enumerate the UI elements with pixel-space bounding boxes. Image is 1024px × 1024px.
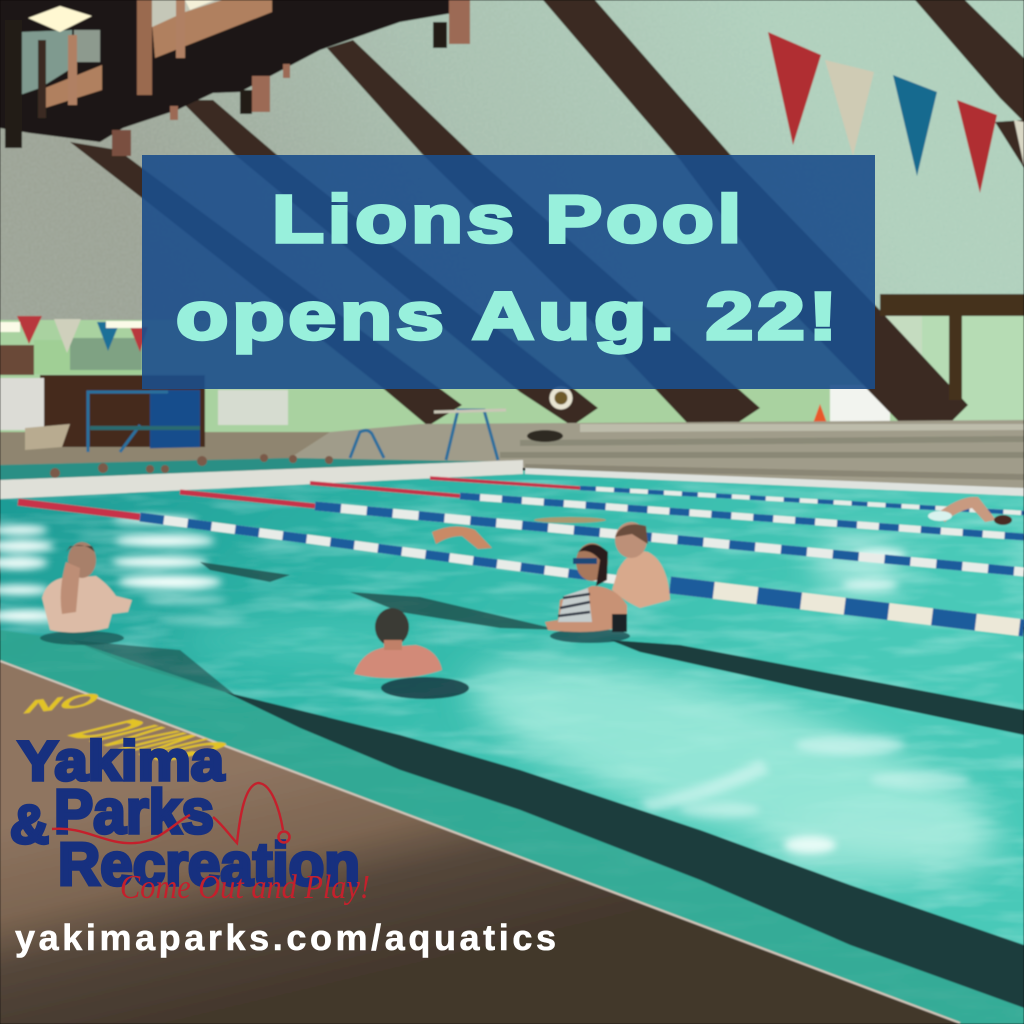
logo ampersand: & — [10, 795, 49, 855]
water glints — [0, 516, 1007, 897]
lifebuoy — [552, 389, 570, 407]
woman with goggles — [545, 543, 630, 643]
swimmer far right — [928, 497, 1012, 525]
lane rope 1 — [18, 502, 1024, 628]
gear on deck — [527, 430, 563, 442]
logo: Yakima Parks & Recreation — [10, 729, 370, 906]
headline line two: opens Aug. 22! — [176, 279, 841, 354]
headline line one: Lions Pool — [272, 182, 745, 257]
logo red swoosh — [52, 783, 290, 843]
logo word Parks: Parks — [54, 778, 214, 847]
painted no diving warning: DIVING — [44, 713, 255, 768]
man in centre — [354, 608, 469, 699]
swimmer middle — [432, 526, 492, 549]
white bulkhead — [0, 460, 523, 499]
water — [0, 470, 1024, 1024]
back wall — [0, 315, 1024, 472]
painted no diving warning: NO — [16, 689, 108, 719]
lane rope 4 — [430, 478, 1024, 513]
logo tagline: Come Out and Play! — [120, 869, 370, 906]
logo word Yakima: Yakima — [18, 729, 225, 792]
far pool — [0, 458, 520, 482]
far coping — [525, 468, 1024, 496]
website address: yakimaparks.com/aquatics — [15, 917, 556, 958]
floor lane stripes — [70, 562, 1024, 1008]
balcony timbers — [0, 0, 470, 156]
headline — [176, 182, 841, 354]
translucent title panel — [142, 155, 875, 389]
man at left — [40, 542, 132, 645]
swimmer underwater — [534, 517, 606, 523]
lane rope 2 — [180, 492, 1024, 572]
pool deck — [0, 662, 960, 1024]
ceiling — [0, 0, 1024, 340]
logo word Recreation: Recreation — [58, 831, 360, 898]
painted no diving warning — [16, 689, 255, 768]
pool edge gutter — [0, 630, 1024, 1024]
deck edge line — [0, 661, 960, 1023]
bunting flags right — [768, 32, 1024, 193]
lifeguard chair and ladder — [88, 392, 506, 460]
far swimmers heads — [50, 454, 333, 478]
bunting flags left — [0, 316, 148, 353]
bleachers — [0, 420, 1024, 492]
lane rope 3 — [310, 483, 1024, 537]
man in background — [612, 522, 670, 608]
roof beams — [70, 0, 1024, 428]
